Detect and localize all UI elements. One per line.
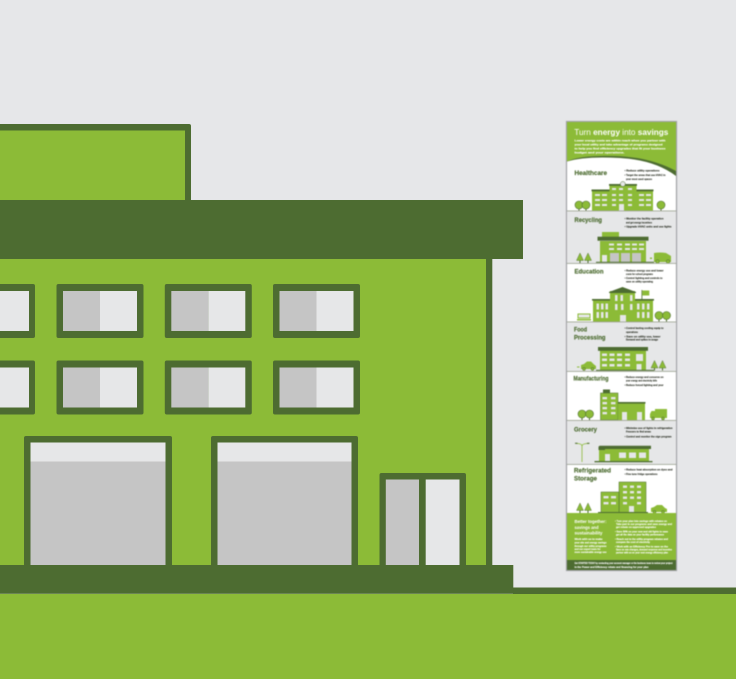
header — [567, 122, 676, 176]
heading: Manufacturing — [574, 376, 609, 382]
bullets — [624, 168, 666, 181]
bullets — [624, 268, 664, 284]
icon: street lamp — [575, 443, 590, 462]
call to action text: more sustainable energy use — [574, 550, 607, 554]
icon: garbage truck — [650, 252, 671, 263]
bullets — [624, 375, 664, 387]
icon: delivery truck — [650, 409, 667, 420]
bullets: • Minimize use of lights in refrigeration — [624, 426, 673, 430]
call to action text: through our utility programs — [574, 544, 607, 548]
icon: pine trees — [576, 253, 592, 263]
call to action heading: Better together: — [574, 519, 607, 524]
bullets: • Save on utility use, lower — [624, 334, 660, 338]
intro text: your local utility and take advantage of programs designed — [574, 143, 663, 147]
icon: storage building — [598, 482, 648, 513]
intro text: to help you find efficiency upgrades that fit your business — [574, 147, 666, 151]
bullets: • Reduce energy use and lower — [624, 268, 664, 272]
call to action bullets: • Reach out to the utility program rebates and — [615, 537, 668, 541]
icon: grocery store — [594, 446, 652, 462]
panel background — [566, 122, 676, 570]
bullets: Demand and spikes in usage — [626, 338, 658, 342]
title: Turn energy into savings — [574, 127, 669, 137]
call to action heading: sustainability — [574, 530, 603, 536]
loading door 1 — [24, 436, 172, 566]
section: recycling — [567, 210, 676, 263]
icon: processing plant — [596, 347, 654, 371]
icon: factory — [600, 390, 646, 420]
heading: Refrigerated — [574, 468, 611, 474]
ground — [0, 588, 736, 679]
call to action text: your site and energy savings — [574, 540, 607, 544]
call to action heading — [574, 519, 607, 536]
call to action bullets: compare the cost of electricity — [616, 540, 650, 544]
bullets: • Upgrade HVAC units and use lights — [624, 224, 672, 228]
call to action bullets: get rebate on approved upgrades — [616, 525, 656, 529]
heading: Grocery — [574, 428, 598, 434]
section: refrigerated storage: Storage — [574, 476, 598, 482]
bullets: • Reduce heat absorption on dyes and — [624, 468, 673, 472]
infographic thumbnail — [566, 122, 676, 570]
call to action bullets: • Turn your plan into savings with rebates on — [615, 519, 667, 523]
icon: car — [577, 362, 596, 370]
section: food processing: Processing — [574, 336, 606, 342]
bullets: • Fine tune fridge operations — [624, 472, 658, 476]
call to action heading: savings and — [574, 525, 599, 530]
icon: bench — [577, 314, 591, 320]
icon: flag — [642, 290, 649, 300]
footer: in the Power and Efficiency rebate and financing for your plan — [574, 565, 649, 569]
loading door 2 — [211, 436, 358, 566]
icon: hospital building — [592, 182, 654, 211]
bullets — [624, 326, 664, 342]
bullets: and get energy incentives — [626, 220, 652, 224]
bullets: • Target the areas that use HVAC in — [624, 173, 666, 177]
bullets: • Control lasting cooling equip to — [624, 326, 664, 330]
section: education — [567, 263, 676, 322]
footer: Get STARTED TODAY by contacting your account manager or the business team to review your project — [574, 561, 673, 565]
icon: trees — [575, 201, 665, 211]
bullets: • Reduce forced lighting and your — [624, 383, 664, 387]
call to action bullets: get all the data on your facility performance — [616, 532, 664, 536]
heading: Healthcare — [574, 171, 608, 177]
call to action bullets — [615, 519, 672, 554]
icon: pine trees — [576, 503, 592, 513]
call to action bullets: Save on rate changes, demand response and incentive — [616, 548, 672, 552]
bullets: save on utility operating — [626, 280, 653, 284]
intro text: Lower energy costs are within reach when you partner with — [574, 139, 666, 143]
section: manufacturing — [567, 371, 676, 420]
section: refrigerated storage — [567, 464, 676, 514]
call to action text: and our expert team for — [574, 547, 601, 551]
intro text: budget and your operations. — [574, 151, 625, 155]
foundation — [0, 565, 513, 594]
large building — [0, 124, 523, 594]
call to action bullets: Take part in our programs and save energy and — [616, 522, 672, 526]
icon: trees — [578, 410, 594, 420]
bullets — [624, 468, 673, 476]
intro text — [574, 139, 666, 155]
bullets: your most used spaces — [626, 177, 652, 181]
section: grocery — [567, 420, 676, 464]
roof band — [0, 200, 523, 259]
rooftop unit — [0, 124, 191, 200]
bullets: • Monitor the facility operation — [624, 216, 664, 220]
icon: pine trees — [651, 360, 666, 370]
call to action bullets: partner with us on your next energy efficiency plan — [616, 550, 668, 554]
panel: call to action — [567, 513, 676, 560]
entrance door — [380, 473, 466, 566]
bullets: your energy and electricity bills — [626, 378, 657, 382]
heading: Recycling — [574, 218, 602, 224]
icon: school building — [592, 287, 654, 322]
bullets: • Reduce energy and conserve on — [624, 375, 664, 379]
bullets: • Reduce utility operations — [624, 168, 660, 172]
bullets: • Control and monitor the sign program — [624, 434, 672, 438]
call to action text — [574, 537, 607, 554]
icon: recycling plant — [596, 232, 654, 263]
section: healthcare — [574, 168, 666, 211]
bullets: costs for school programs — [626, 272, 653, 276]
footer — [567, 560, 676, 570]
window row 1 — [0, 284, 360, 338]
bullets: Freezers to find areas — [626, 430, 651, 434]
icon: trees — [655, 312, 670, 322]
bullets: operations — [626, 330, 638, 334]
heading: Education — [574, 270, 604, 276]
bullets — [624, 216, 672, 228]
building wall — [0, 259, 486, 565]
section: food processing — [567, 322, 676, 371]
bullets — [624, 426, 673, 438]
icon: car — [651, 505, 667, 514]
window row 2 — [0, 360, 360, 414]
heading: Food — [574, 328, 587, 334]
call to action bullets: • Save 30% on your new and old lights to save — [615, 530, 668, 534]
bullets: • Control lighting and controls to — [624, 276, 663, 280]
call to action text: Work with us to make — [574, 537, 603, 541]
call to action bullets: • Work with an Efficiency Pro to save on the — [615, 544, 668, 548]
